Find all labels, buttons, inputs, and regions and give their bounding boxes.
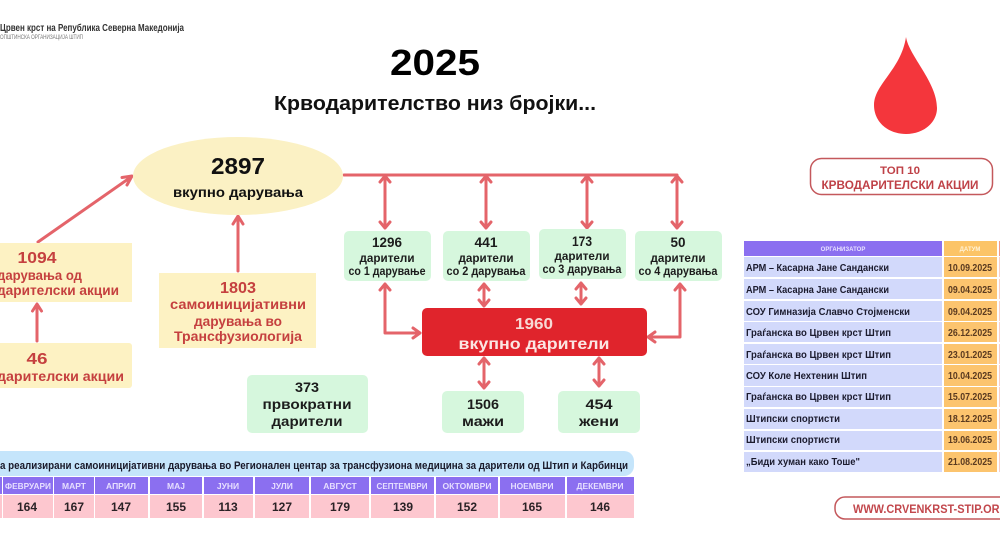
monthly table banner bbox=[0, 451, 634, 476]
monthly values: 113 bbox=[218, 500, 238, 514]
box: 4 donations bbox=[635, 231, 722, 281]
box: women bbox=[558, 391, 640, 433]
total donors box: вкупно дарители bbox=[458, 336, 610, 353]
box: self-initiated donations: Трансфузиологија bbox=[174, 328, 302, 344]
title: 2025 bbox=[390, 42, 480, 83]
table dates: 23.01.2025 bbox=[948, 350, 992, 361]
month labels: ОКТОМВРИ bbox=[442, 481, 492, 491]
box: men bbox=[442, 391, 524, 433]
total donations ellipse: вкупно дарувања bbox=[173, 184, 303, 200]
box: self-initiated donations: самоиницијативни bbox=[170, 296, 306, 312]
box: 3 donations: 173 bbox=[572, 234, 592, 249]
table dates: 26.12.2025 bbox=[948, 328, 992, 339]
table dates bbox=[948, 263, 992, 468]
month labels: МАЈ bbox=[167, 481, 185, 491]
month labels: ЈУЛИ bbox=[271, 481, 293, 491]
monthly values: 146 bbox=[590, 500, 610, 514]
box: number of actions: 46 bbox=[26, 351, 48, 368]
monthly values bbox=[17, 500, 610, 514]
monthly table banner: а реализирани самоиницијативни дарувања во Регионален центар за трансфузиона медицина за дарители од Штип и Карбинци bbox=[0, 460, 628, 472]
box: donations from actions: дарителски акции bbox=[0, 282, 119, 298]
table dates: 10.04.2025 bbox=[948, 371, 992, 382]
box: number of actions bbox=[0, 343, 132, 388]
box: 3 donations bbox=[539, 229, 626, 279]
monthly values: 139 bbox=[393, 500, 413, 514]
month labels: НОЕМВРИ bbox=[510, 481, 554, 491]
box: women: 454 bbox=[586, 396, 613, 412]
organisation logo text: Црвен крст на Република Северна Македонија bbox=[0, 22, 184, 34]
organisation logo text: ОПШТИНСКА ОРГАНИЗАЦИЈА ШТИП bbox=[0, 35, 83, 41]
box: 1 donation: со 1 дарување bbox=[348, 264, 426, 278]
box: number of actions: дарителски акции bbox=[0, 368, 124, 384]
top 10 badge bbox=[810, 158, 992, 194]
box: 4 donations: со 4 дарувања bbox=[638, 264, 718, 278]
table dates: 21.08.2025 bbox=[948, 457, 992, 468]
month labels: ДЕКЕМВРИ bbox=[576, 481, 624, 491]
box: donations from actions bbox=[0, 243, 132, 302]
box: 1 donation: 1296 bbox=[372, 235, 402, 250]
month headers bbox=[0, 477, 634, 494]
total donations ellipse: 2897 bbox=[211, 153, 265, 179]
box: 4 donations: 50 bbox=[670, 235, 686, 250]
box: first-time donors: 373 bbox=[295, 379, 319, 395]
top 10 table bbox=[744, 241, 1000, 472]
box: 2 donations: дарители bbox=[458, 251, 514, 265]
top 10 table: ОРГАНИЗАТОР bbox=[821, 247, 865, 253]
monthly values: 155 bbox=[166, 500, 186, 514]
organisation logo text bbox=[0, 22, 184, 41]
month labels: МАРТ bbox=[62, 481, 87, 491]
value cells bbox=[0, 495, 634, 518]
box: men: мажи bbox=[462, 413, 504, 429]
box: first-time donors: првократни bbox=[262, 396, 352, 412]
box: self-initiated donations: дарувања во bbox=[194, 313, 282, 329]
table dates: 18.12.2025 bbox=[948, 414, 992, 425]
box: donations from actions: 1094 bbox=[18, 250, 57, 267]
box: 1 donation: дарители bbox=[360, 251, 414, 265]
table rows: АРМ – Касарна Јане Сандански bbox=[746, 262, 889, 274]
box: 4 donations: дарители bbox=[650, 251, 706, 265]
total donors box: 1960 bbox=[515, 316, 553, 333]
table dates: 09.04.2025 bbox=[948, 285, 992, 296]
table rows: СОУ Гимназија Славчо Стојменски bbox=[746, 306, 910, 318]
table rows: СОУ Коле Нехтенин Штип bbox=[746, 370, 867, 382]
monthly values: 165 bbox=[522, 500, 542, 514]
box: first-time donors: дарители bbox=[272, 413, 342, 429]
table rows bbox=[744, 257, 1000, 472]
table dates: 15.07.2025 bbox=[948, 392, 992, 403]
month labels: АПРИЛ bbox=[106, 481, 136, 491]
monthly values: 179 bbox=[330, 500, 350, 514]
month labels bbox=[5, 481, 624, 491]
box: 2 donations bbox=[443, 231, 530, 281]
top 10 table: ДАТУМ bbox=[960, 247, 980, 253]
website badge bbox=[835, 497, 1000, 519]
table rows: Штипски спортисти bbox=[746, 413, 840, 425]
monthly table bbox=[0, 477, 634, 518]
month labels: ЈУНИ bbox=[217, 481, 239, 491]
box: women: жени bbox=[578, 413, 619, 429]
table rows: Граѓанска во Црвен крст Штип bbox=[746, 349, 891, 361]
connector arrows bbox=[32, 175, 685, 388]
box: 2 donations: со 2 дарувања bbox=[446, 264, 526, 278]
table rows: АРМ – Касарна Јане Сандански bbox=[746, 284, 889, 296]
subtitle: Крводарителство низ бројки... bbox=[274, 93, 596, 115]
table rows: „Биди хуман како Тоше" bbox=[746, 456, 860, 468]
table dates: 10.09.2025 bbox=[948, 263, 992, 274]
month labels: ФЕВРУАРИ bbox=[5, 481, 51, 491]
monthly values: 127 bbox=[272, 500, 292, 514]
box: 1 donation bbox=[344, 231, 431, 281]
box: self-initiated donations: 1803 bbox=[220, 280, 256, 297]
monthly values: 147 bbox=[111, 500, 131, 514]
top 10 badge: КРВОДАРИТЕЛСКИ АКЦИИ bbox=[822, 180, 978, 192]
total donations ellipse bbox=[133, 137, 343, 215]
table rows: Граѓанска во Црвен крст Штип bbox=[746, 327, 891, 339]
table rows: Граѓанска во Црвен крст Штип bbox=[746, 391, 891, 403]
box: men: 1506 bbox=[467, 396, 499, 412]
monthly values: 167 bbox=[64, 500, 84, 514]
box: self-initiated donations bbox=[159, 273, 316, 348]
month labels: СЕПТЕМВРИ bbox=[376, 481, 428, 491]
total donors box bbox=[422, 308, 647, 356]
table rows: Штипски спортисти bbox=[746, 434, 840, 446]
table dates: 19.06.2025 bbox=[948, 435, 992, 446]
monthly values: 164 bbox=[17, 500, 37, 514]
table dates: 09.04.2025 bbox=[948, 307, 992, 318]
box: 3 donations: дарители bbox=[554, 249, 610, 263]
top 10 badge: ТОП 10 bbox=[880, 165, 920, 177]
box: first-time donors bbox=[247, 375, 368, 433]
icon: blood drop bbox=[874, 37, 937, 134]
box: 2 donations: 441 bbox=[474, 235, 498, 250]
month labels: АВГУСТ bbox=[323, 481, 358, 491]
monthly values: 152 bbox=[457, 500, 477, 514]
box: 3 donations: со 3 дарувања bbox=[542, 262, 622, 276]
